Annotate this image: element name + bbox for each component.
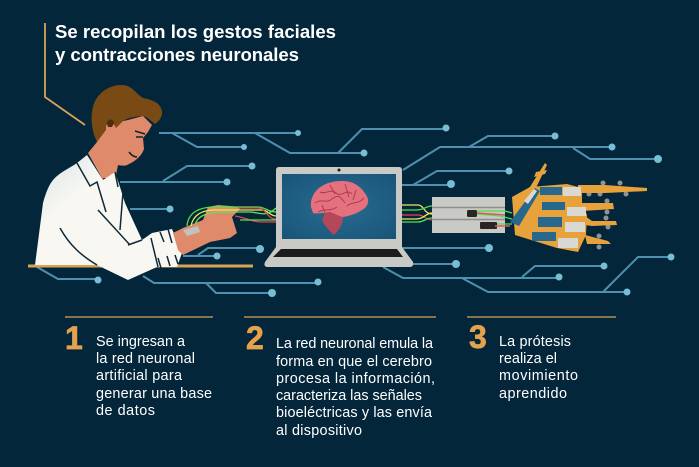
keyboard xyxy=(273,249,403,257)
step 2: 2 xyxy=(246,320,264,356)
step 3 text: La prótesis xyxy=(499,334,571,350)
laptop base xyxy=(264,247,413,267)
step 2 text: procesa la información, xyxy=(276,371,435,387)
heading callout line xyxy=(45,23,85,125)
step 1 text: de datos xyxy=(96,403,155,419)
step 1: 1 xyxy=(65,320,83,356)
screen xyxy=(282,174,396,239)
step 2 text xyxy=(276,336,435,439)
palm xyxy=(512,184,587,252)
step 3 xyxy=(467,317,616,402)
step 3 text: realiza el xyxy=(499,351,557,367)
step 1 text: artificial para xyxy=(96,368,182,384)
step 2 text: La red neuronal emula la xyxy=(276,336,433,352)
title: Se recopilan los gestos faciales xyxy=(55,21,336,42)
desk line xyxy=(28,264,253,268)
step 1 text: la red neuronal xyxy=(96,351,195,367)
device wires xyxy=(477,211,512,224)
thumb xyxy=(528,163,547,190)
step 1 text: Se ingresan a xyxy=(96,334,185,350)
ear xyxy=(107,120,114,127)
step 1 text: generar una base xyxy=(96,386,212,402)
laptop lid xyxy=(276,167,402,248)
device block xyxy=(432,197,512,233)
illustration: scientist xyxy=(35,85,242,280)
camera xyxy=(338,168,340,172)
step 2 text: al dispositivo xyxy=(276,423,362,439)
step 3 text: aprendido xyxy=(499,386,567,402)
white plates xyxy=(524,187,586,248)
coat lines xyxy=(60,163,178,268)
connectors xyxy=(467,210,477,217)
title: y contracciones neuronales xyxy=(55,44,299,65)
step 2 xyxy=(244,317,436,439)
face details xyxy=(129,131,145,157)
step 3 text xyxy=(499,334,578,402)
blue plates xyxy=(510,187,565,241)
step 3 text: movimiento xyxy=(499,368,578,384)
neck and face xyxy=(88,116,152,180)
robotic hand xyxy=(510,163,647,252)
wrist sensor xyxy=(183,226,200,236)
brain xyxy=(311,181,368,235)
sensor wires to laptop xyxy=(187,207,276,226)
title xyxy=(55,21,336,65)
shirt xyxy=(103,178,125,232)
step 1 text xyxy=(96,334,212,419)
step 2 text: forma en que el cerebro xyxy=(276,354,432,370)
hair xyxy=(92,85,162,142)
wires laptop to device xyxy=(402,205,432,222)
step 1 xyxy=(65,317,213,419)
fingers xyxy=(578,185,647,193)
step 2 text: caracteriza las señales xyxy=(276,388,422,404)
bolts xyxy=(586,180,628,250)
laptop xyxy=(264,167,413,267)
lab coat xyxy=(35,155,182,280)
circuit traces xyxy=(37,124,674,297)
step 2 text: bioeléctricas y las envía xyxy=(276,405,432,421)
step 3: 3 xyxy=(469,319,487,355)
hand xyxy=(173,205,242,255)
